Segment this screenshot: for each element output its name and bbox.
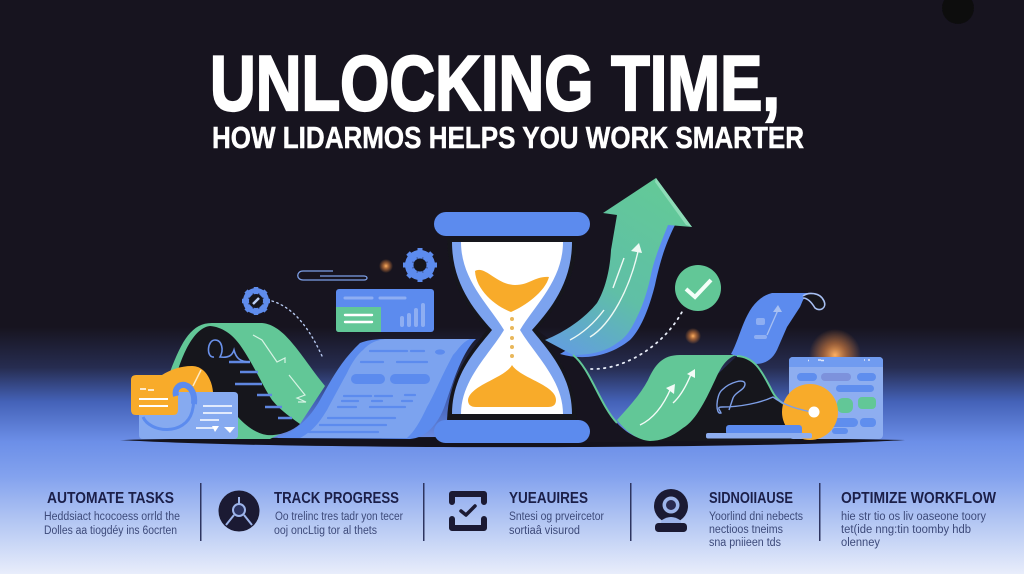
dark region beside hourglass base — [537, 330, 655, 442]
feature: track progress: TRACK PROGRESS — [274, 490, 399, 507]
title: UNLOCKING TIME, — [210, 39, 780, 127]
white wave arrows — [640, 372, 692, 425]
dark spot top right — [942, 0, 974, 24]
top cap — [434, 212, 590, 236]
dark region under wave — [650, 356, 795, 441]
arrow green body — [545, 178, 692, 355]
small gear icon — [242, 287, 270, 315]
feature: track progress: Oo trelinc tres tadr yon tecer — [275, 511, 403, 523]
feature: sidnoiiause: Yoorlind dni nebects — [709, 511, 803, 523]
feature: sidnoiiause: sna pniieen tds — [709, 537, 781, 549]
hourglass dark outline — [447, 238, 577, 425]
green wave ribbon — [617, 355, 737, 441]
feature: optimize workflow: OPTIMIZE WORKFLOW — [841, 490, 996, 507]
feature: track progress: ooj oncLtig tor al thets — [274, 525, 377, 537]
orange folder card — [131, 366, 213, 430]
ground shadow — [120, 437, 905, 447]
feature: automate tasks: Dolles aa tiogdéy ins 6ocrten — [44, 525, 177, 537]
feature: optimize workflow: hie str tio os liv oaseone toory — [841, 511, 986, 523]
green ribbon — [170, 323, 325, 439]
blue scrolling document — [277, 339, 476, 439]
arrow blue underside — [560, 225, 675, 357]
dial centre — [808, 406, 820, 418]
illustration: left ribbon and documents — [131, 248, 476, 439]
dashboard card — [336, 289, 434, 332]
glow orb left — [379, 259, 393, 273]
thin green edge — [573, 355, 786, 423]
feature: yueauires: YUEAUIRES — [509, 490, 588, 507]
paperclip line — [298, 271, 367, 280]
icon: webcam — [654, 489, 688, 532]
illustration: hourglass — [434, 212, 590, 443]
feature: automate tasks — [44, 490, 180, 537]
feature: optimize workflow: olenney — [841, 537, 880, 549]
feature: sidnoiiause: SIDNOIIAUSE — [709, 490, 793, 507]
bottom sand — [468, 365, 556, 407]
bottom cap — [434, 420, 590, 443]
large gear icon — [403, 248, 437, 282]
divider — [200, 483, 202, 541]
blue flag document — [731, 293, 825, 364]
dotted connector left — [272, 301, 322, 356]
subtitle: HOW LIDARMOS HELPS YOU WORK SMARTER — [212, 120, 804, 155]
feature: yueauires — [452, 490, 604, 537]
feature: yueauires: Sntesi og prveircetor — [509, 511, 604, 523]
illustration: right ribbon and panels — [573, 265, 883, 441]
feature: track progress — [218, 490, 403, 537]
signature line — [717, 381, 812, 413]
orange dial — [782, 384, 838, 440]
top sand — [475, 270, 549, 312]
browser panel — [789, 357, 883, 439]
icon: compass — [218, 490, 260, 532]
arrow white strokes — [570, 247, 639, 340]
orange glow — [809, 329, 861, 381]
feature: optimize workflow: tet(ide nng:tin toomby hdb — [841, 524, 971, 536]
icon: checklist frame — [452, 494, 484, 528]
feature: optimize workflow — [841, 490, 996, 549]
light blue card — [139, 392, 238, 439]
glow orb right — [685, 328, 701, 344]
feature: sidnoiiause — [654, 489, 803, 549]
keyboard base — [706, 425, 812, 438]
feature: yueauires: sortiaâ visurod — [509, 525, 580, 537]
divider — [630, 483, 632, 541]
feature: automate tasks: AUTOMATE TASKS — [47, 490, 174, 507]
check badge — [675, 265, 721, 311]
feature: automate tasks: Heddsiact hcocoess orrld the — [44, 511, 180, 523]
loop connector — [143, 385, 194, 430]
falling grains — [510, 317, 514, 358]
divider — [819, 483, 820, 541]
illustration: upward arrow — [545, 178, 692, 357]
feature: sidnoiiause: nectioos tneims — [709, 524, 783, 536]
glass — [452, 242, 572, 414]
dotted connector right — [591, 310, 683, 369]
divider — [423, 483, 424, 541]
